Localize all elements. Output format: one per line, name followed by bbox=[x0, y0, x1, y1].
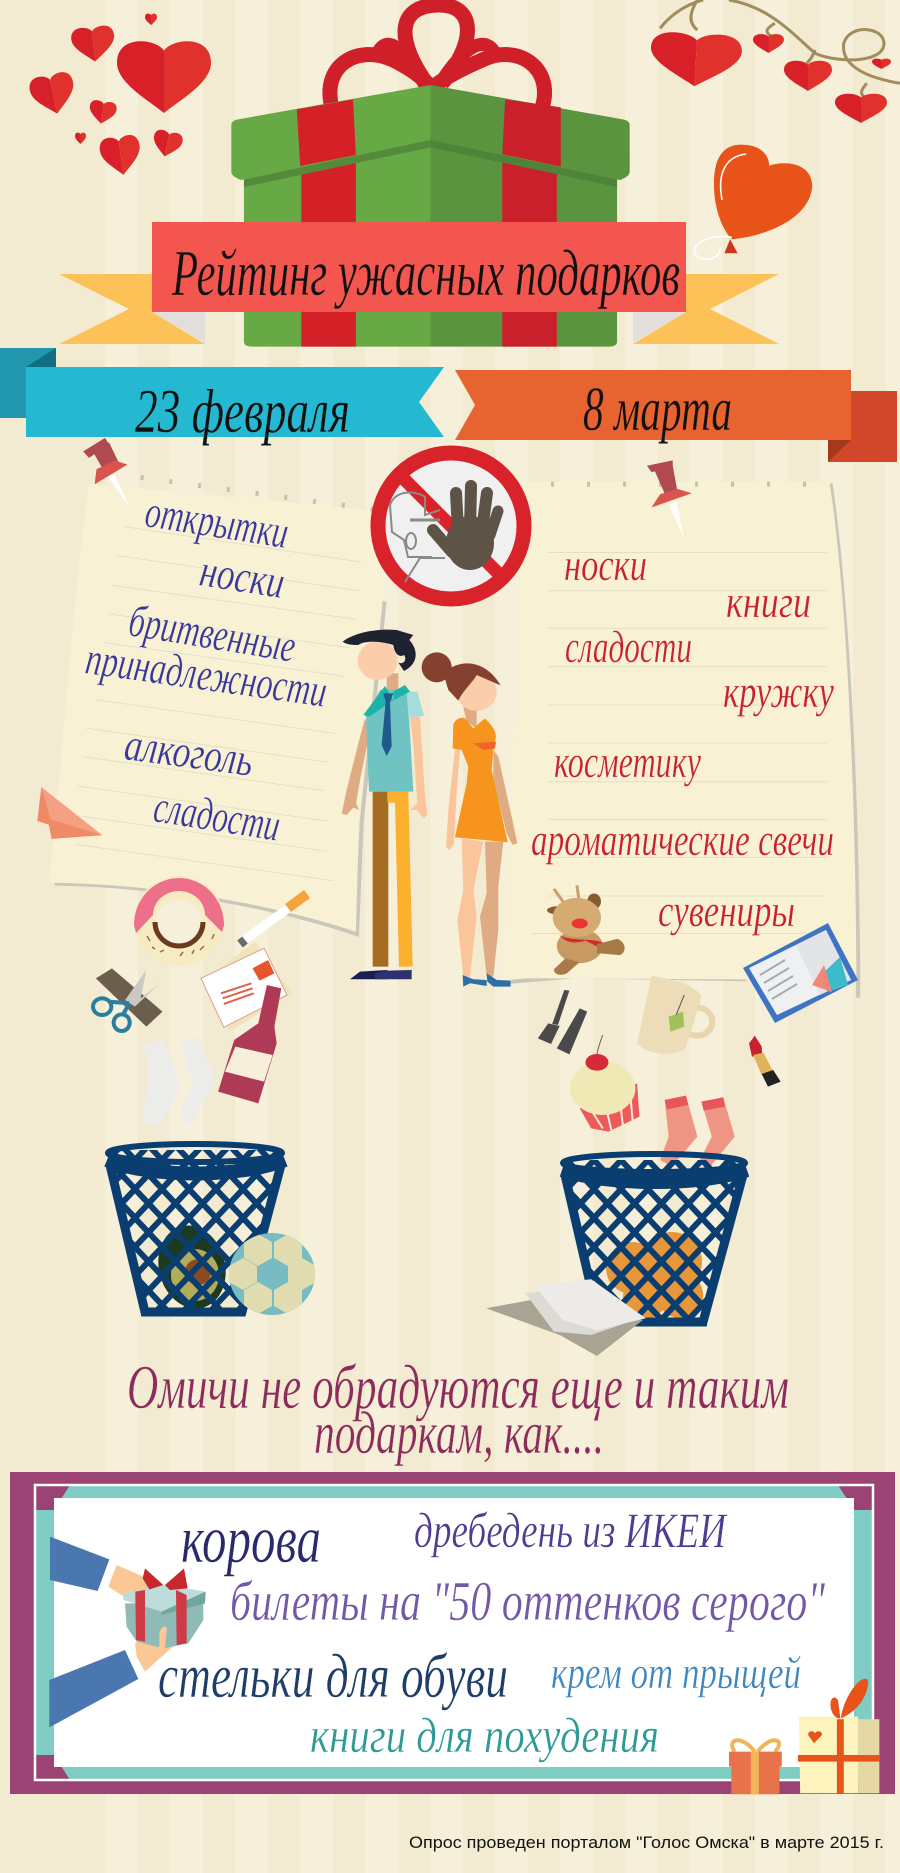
icon: white socks bbox=[143, 1038, 215, 1125]
gift ideas text bbox=[158, 1501, 825, 1763]
panel: right note paper bbox=[505, 482, 858, 998]
idea: дребедень из ИКЕИ bbox=[414, 1502, 728, 1558]
icon: crumpled papers bbox=[486, 1279, 646, 1356]
icon: small gift bbox=[729, 1740, 782, 1794]
hands giving a gift bbox=[49, 1537, 206, 1727]
source note: Опрос проведен порталом "Голос Омска" в марте 2015 г. bbox=[409, 1833, 884, 1852]
icon: pink socks bbox=[660, 1096, 735, 1168]
right list bbox=[531, 539, 834, 936]
idea: стельки для обуви bbox=[158, 1643, 508, 1711]
icon: lipstick bbox=[749, 1036, 781, 1087]
tie bbox=[382, 693, 393, 756]
person: woman bbox=[422, 652, 517, 987]
trash basket: left bbox=[107, 1144, 285, 1312]
idea: корова bbox=[181, 1501, 321, 1577]
hands bbox=[108, 1565, 155, 1600]
icon: paper plane bbox=[37, 787, 102, 839]
icon: mascara bbox=[538, 990, 587, 1054]
item: сладости bbox=[150, 781, 284, 851]
ribbon label: 23 февраля bbox=[135, 378, 350, 446]
person silhouette bbox=[390, 492, 445, 582]
heading bbox=[127, 1354, 789, 1466]
dress bbox=[453, 718, 508, 842]
icon: avocado bbox=[149, 1218, 235, 1316]
item: открытки bbox=[142, 485, 292, 558]
item: алкоголь bbox=[122, 718, 256, 786]
item: косметику bbox=[554, 736, 701, 787]
ribbon: 23 February bbox=[0, 348, 444, 446]
frame corners bbox=[35, 1485, 70, 1510]
person: man bbox=[342, 630, 427, 979]
hair bbox=[343, 630, 416, 671]
face bbox=[358, 641, 398, 680]
shoes bbox=[350, 970, 387, 979]
hearts: top left bbox=[27, 14, 211, 178]
icon: stop sign bbox=[378, 453, 524, 599]
icon: cigarette bbox=[240, 894, 307, 944]
gift lid bbox=[231, 85, 430, 180]
ribbon: 8 March bbox=[455, 370, 897, 462]
item: сладости bbox=[565, 621, 692, 672]
banner face bbox=[152, 222, 686, 312]
sleeves bbox=[50, 1537, 109, 1591]
hearts and vine: top right bbox=[649, 0, 900, 123]
item: принадлежности bbox=[83, 632, 330, 717]
icon: oranges bbox=[606, 1232, 703, 1319]
gift box bbox=[125, 1603, 203, 1648]
shirt bbox=[366, 688, 413, 792]
gift box bbox=[231, 5, 630, 347]
item: носки bbox=[196, 544, 288, 608]
stop hand bbox=[433, 486, 498, 570]
trash basket: right bbox=[562, 1154, 747, 1322]
icon: left push pin bbox=[83, 438, 130, 508]
heart balloon bbox=[694, 145, 812, 259]
icon: mug bbox=[637, 976, 712, 1054]
idea: крем от прыщей bbox=[551, 1647, 801, 1698]
icon: big gift bbox=[798, 1679, 879, 1793]
panel: gift ideas frame bbox=[10, 1472, 895, 1794]
ribbon label: 8 марта bbox=[583, 376, 732, 444]
icon: reindeer toy bbox=[547, 885, 625, 975]
title banner bbox=[59, 222, 779, 344]
gift body bbox=[244, 140, 430, 347]
left list bbox=[83, 485, 330, 851]
shoes bbox=[463, 975, 487, 987]
icon: donut bbox=[134, 876, 224, 966]
idea: книги для похудения bbox=[310, 1707, 659, 1763]
item: носки bbox=[564, 539, 647, 590]
trousers bbox=[373, 792, 388, 967]
banner tails bbox=[59, 274, 205, 344]
gift bow bbox=[330, 5, 545, 107]
bow bbox=[143, 1568, 163, 1589]
item: бритвенные bbox=[125, 595, 299, 672]
heading line 2: подаркам, как.... bbox=[314, 1400, 604, 1466]
item: кружку bbox=[723, 666, 834, 717]
panel: left note paper bbox=[49, 477, 385, 934]
icon: open book bbox=[743, 923, 858, 1023]
face bbox=[457, 672, 497, 711]
icon: cupcake bbox=[570, 1035, 639, 1132]
item: сувениры bbox=[658, 885, 795, 936]
icon: postcards bbox=[201, 942, 293, 1032]
icon: wine bottle bbox=[218, 985, 281, 1103]
hair and bun bbox=[422, 652, 452, 682]
icon: right push pin bbox=[647, 460, 692, 539]
icon: ball bbox=[229, 1233, 316, 1315]
icon: comb and scissors bbox=[93, 968, 162, 1031]
item: книги bbox=[726, 576, 811, 627]
